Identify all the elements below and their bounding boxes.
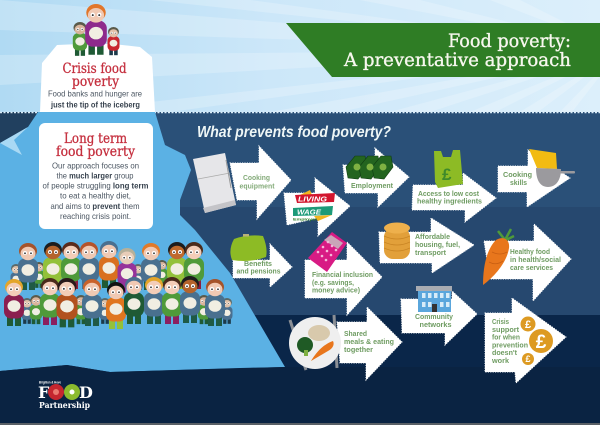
arrow: living wage	[284, 178, 350, 236]
arrow: access to low cost healthy ingredients	[412, 150, 496, 222]
panel: long term food poverty: Long term	[64, 131, 127, 147]
arrow: crisis support: support	[492, 325, 520, 334]
crowd of people	[4, 241, 232, 329]
panel: long term food poverty: Our approach focuses on	[52, 160, 139, 170]
arrow: employment: Employment	[351, 181, 394, 190]
icon: banknotes	[346, 156, 393, 179]
title banner	[286, 23, 600, 77]
arrow: affordable housing, fuel, transport: Affordable	[415, 232, 450, 241]
icon: building	[416, 286, 452, 312]
arrow: financial inclusion: Financial inclusion	[312, 270, 373, 279]
seabed	[0, 365, 600, 423]
arrow: community networks	[401, 286, 477, 345]
panel: long term food poverty: and aims to prevent them	[50, 201, 140, 211]
logo: food partnership: F	[38, 383, 50, 402]
heading: crisis food poverty: poverty	[72, 74, 119, 90]
icon: carrot	[483, 229, 514, 285]
arrow: access to low cost healthy ingredients: Access to low cost	[418, 189, 480, 198]
arrow: cooking equipment: equipment	[240, 182, 275, 190]
arrow: access to low cost healthy ingredients: healthy ingredients	[417, 196, 482, 206]
arrow: healthy food in health/social care services: Healthy food	[510, 247, 550, 256]
sky background	[0, 0, 600, 113]
icon: pound coins: £	[525, 354, 531, 364]
icon: living wage logo: LIVING	[298, 196, 328, 204]
arrow: cooking skills: Cooking	[503, 170, 532, 179]
iceberg below water	[0, 112, 285, 372]
arrow: cooking skills	[498, 149, 575, 207]
arrow: healthy food in health/social care services	[483, 224, 571, 301]
arrow: crisis support: for when	[492, 332, 520, 342]
arrow: community networks: Community	[415, 312, 453, 321]
arrow: financial inclusion: (e.g. savings,	[312, 278, 354, 287]
logo: food partnership: D	[79, 383, 93, 402]
icon: pan with food	[529, 149, 575, 187]
arrow: affordable housing, fuel, transport: transport	[415, 248, 447, 257]
arrow: shared meals and eating together	[289, 307, 402, 380]
logo: food partnership: Partnership	[39, 400, 90, 410]
arrow: crisis support	[485, 298, 566, 383]
arrow: affordable housing, fuel, transport	[379, 218, 474, 273]
text: tip of the iceberg	[48, 88, 142, 110]
title banner: Food poverty:	[448, 31, 571, 52]
panel: long term food poverty: reaching crisis point.	[60, 211, 131, 221]
arrow: healthy food in health/social care services: care services	[510, 263, 553, 272]
arrow: cooking equipment: Cooking	[243, 173, 270, 182]
arrow: benefits and pensions: and pensions	[236, 266, 281, 276]
panel: long term food poverty: the much larger group	[56, 170, 134, 180]
water background	[0, 112, 600, 425]
icon: coin stack	[384, 222, 410, 259]
panel: long term food poverty: of people struggling long term	[42, 180, 148, 190]
arrow: employment	[343, 148, 409, 207]
icon: shopping bag: £	[442, 165, 452, 184]
family trio on iceberg	[73, 4, 120, 56]
icon: pound coins: £	[536, 332, 547, 353]
icon: pound coins	[520, 316, 553, 365]
arrow: shared meals and eating together: together	[344, 345, 373, 354]
arrow: crisis support: prevention	[492, 340, 528, 350]
icon: living wage logo	[293, 190, 335, 222]
icon: calculator	[308, 232, 347, 272]
iceberg tip	[40, 44, 155, 112]
arrow: affordable housing, fuel, transport: housing, fuel,	[415, 240, 460, 249]
icon: fridge	[193, 153, 236, 213]
logo: food partnership	[38, 380, 93, 410]
heading: crisis food poverty: Crisis food	[62, 61, 127, 77]
arrow: financial inclusion: money advice)	[312, 286, 361, 294]
arrow: benefits and pensions: Benefits	[244, 259, 272, 268]
iceberg facet	[0, 127, 28, 155]
panel: long term food poverty: food poverty	[56, 144, 135, 160]
arrow: crisis support: Crisis	[492, 317, 509, 326]
heading: crisis food poverty	[62, 61, 127, 90]
panel: long term food poverty	[39, 123, 153, 229]
arrow: shared meals and eating together: Shared	[344, 329, 367, 338]
icon: purse	[230, 234, 267, 261]
arrow: healthy food in health/social care services: in health/social	[510, 255, 561, 264]
arrow: crisis support: work	[491, 356, 509, 365]
icon: pound coins: £	[525, 319, 531, 331]
arrow: shared meals and eating together: meals & eating	[344, 337, 394, 346]
icon: living wage logo: Employer	[293, 218, 318, 222]
arrow: benefits and pensions	[230, 234, 292, 287]
arrow: crisis support: doesn't	[492, 348, 518, 357]
arrow: cooking equipment	[193, 146, 291, 219]
text: tip of the iceberg: just the tip of the iceberg	[50, 100, 140, 110]
logo: food partnership: Brighton & Hove	[39, 380, 62, 384]
title banner: A preventative approach	[343, 50, 571, 71]
icon: living wage logo: WAGE	[297, 210, 321, 216]
icon: plate of food	[289, 315, 341, 370]
arrow: cooking skills: skills	[510, 178, 527, 187]
section heading: What prevents food poverty?	[197, 124, 391, 141]
arrow: community networks: networks	[420, 320, 452, 329]
panel: long term food poverty: to eat a healthy diet,	[60, 190, 131, 200]
text: tip of the iceberg: Food banks and hunger are	[48, 88, 142, 98]
arrow: financial inclusion	[305, 232, 382, 315]
